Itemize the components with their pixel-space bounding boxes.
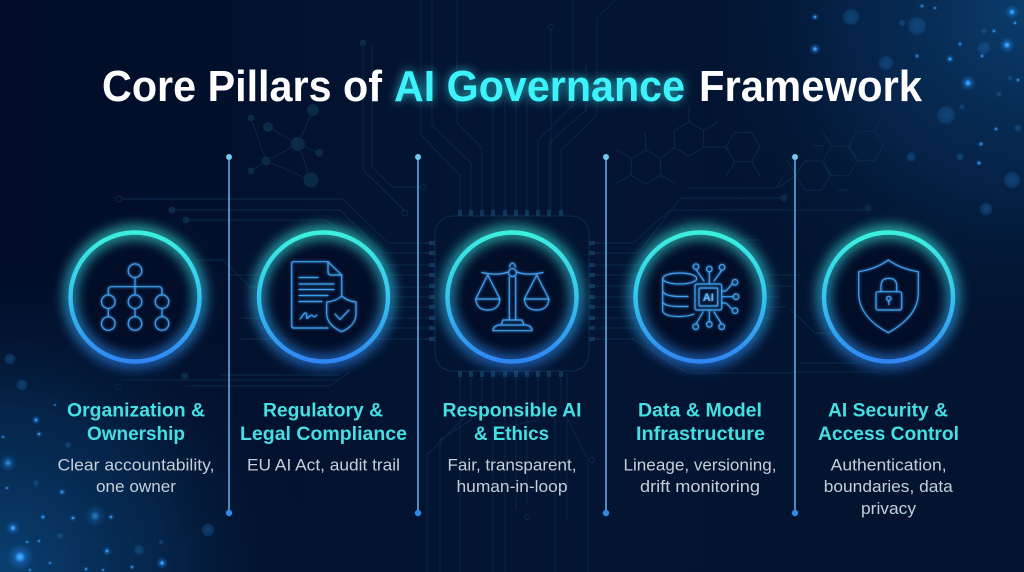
heading: Infrastructure xyxy=(636,423,765,445)
ring xyxy=(258,232,388,362)
icon: scales of justice xyxy=(476,263,549,331)
heading: Responsible AI xyxy=(442,400,582,422)
description: drift monitoring xyxy=(640,478,760,496)
description: Fair, transparent, xyxy=(448,456,576,474)
description xyxy=(58,456,214,496)
ring xyxy=(447,232,577,362)
molecule network left xyxy=(248,104,322,187)
heading: Organization & xyxy=(67,400,205,422)
description: Authentication, xyxy=(831,456,947,474)
heading: Access Control xyxy=(818,423,959,445)
description: EU AI Act, audit trail xyxy=(247,456,400,474)
description: human-in-loop xyxy=(456,478,568,496)
title: Core Pillars of xyxy=(102,63,382,111)
heading: AI Security & xyxy=(828,400,948,422)
title: Framework xyxy=(699,63,923,111)
particles bottom left xyxy=(0,353,215,572)
heading xyxy=(818,400,959,445)
panel: organization and ownership xyxy=(58,232,214,496)
description: Lineage, versioning, xyxy=(624,456,776,474)
heading: Ownership xyxy=(87,423,185,445)
description xyxy=(824,456,954,518)
icon: database and AI chip xyxy=(663,264,739,330)
title xyxy=(102,63,923,111)
ring xyxy=(70,232,200,362)
circuit board traces xyxy=(116,0,880,572)
heading: Data & Model xyxy=(638,400,762,422)
panel: responsible AI and ethics xyxy=(442,232,582,496)
description: privacy xyxy=(861,500,917,518)
description: boundaries, data xyxy=(824,478,954,496)
ring xyxy=(824,232,954,362)
panel: data and model infrastructure xyxy=(624,232,776,496)
description xyxy=(448,456,576,496)
panel: AI security and access control xyxy=(818,232,959,518)
ring xyxy=(635,232,765,362)
icon: org chart xyxy=(102,264,169,330)
icon: document with shield xyxy=(292,262,356,332)
panel: regulatory and legal compliance xyxy=(240,232,407,474)
heading: Regulatory & xyxy=(263,400,383,422)
heading xyxy=(636,400,765,445)
heading xyxy=(442,400,582,445)
heading: & Ethics xyxy=(474,423,549,445)
icon: database and AI chip: AI xyxy=(703,292,714,304)
hexagon molecule right xyxy=(615,106,883,190)
particles top right xyxy=(809,3,1022,216)
description: Clear accountability, xyxy=(58,456,214,474)
separator lines xyxy=(226,154,798,516)
heading xyxy=(240,400,407,445)
description xyxy=(624,456,776,496)
heading: Legal Compliance xyxy=(240,423,407,445)
description: one owner xyxy=(96,478,177,496)
title: AI Governance xyxy=(394,63,685,111)
icon: shield with padlock xyxy=(859,260,918,333)
heading xyxy=(67,400,205,445)
